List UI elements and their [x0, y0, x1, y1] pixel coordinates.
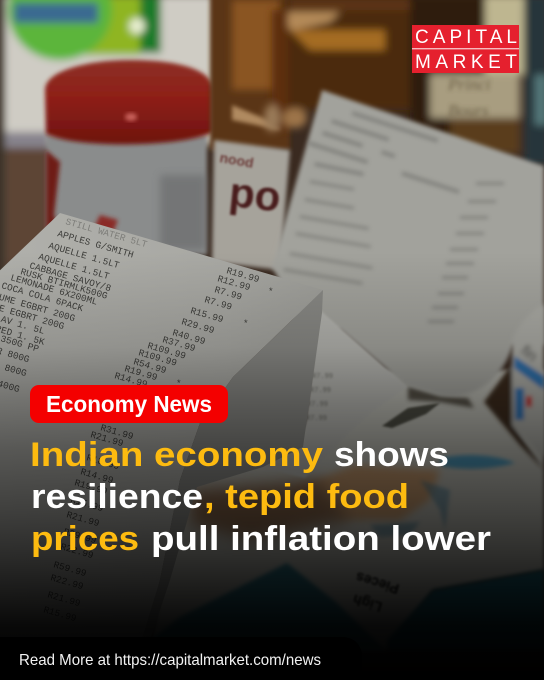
receipt item text: STILL WATER 5LT [64, 216, 149, 250]
red lid jar [45, 60, 213, 262]
category tag: Economy News: Economy News [46, 391, 212, 417]
headline: prices [31, 520, 139, 558]
receipt item text: R14.99 [113, 370, 149, 390]
receipt item text: R7.99 [213, 284, 243, 303]
receipt item text: AQUELLE 1.5LT [47, 240, 121, 271]
receipt item text: R19.99 [123, 363, 159, 383]
receipt item text: * [243, 318, 249, 329]
receipt item text: R54.99 [132, 356, 168, 376]
headline: Indian economy [30, 436, 323, 474]
curled receipt: R7.99 [307, 401, 328, 409]
receipt item text: 350G PP [0, 333, 40, 355]
peanut butter bottle: po [227, 168, 283, 220]
receipt item text: R40.99 [171, 327, 207, 347]
front receipt [0, 213, 323, 645]
shelf products: Bours [448, 101, 489, 120]
receipt item text: R22.99 [59, 541, 95, 561]
curled receipt: R7.99 [312, 373, 333, 381]
receipt item text: AQUELLE 1.5LT [37, 251, 111, 282]
receipt item text: R29.99 [62, 526, 98, 546]
curled receipt: R7.99 [306, 415, 327, 423]
receipt item text: R7.99 [203, 294, 233, 313]
receipt item text: CABBAGE SAVOY/8 [28, 260, 113, 294]
receipt item text: R19.99 [225, 265, 261, 285]
receipt item text: R29.99 [180, 316, 216, 336]
receipt item text [0, 216, 274, 624]
logo: Capital Market [412, 25, 519, 73]
receipt item text: R12.99 [216, 273, 252, 293]
headline [30, 436, 491, 558]
headline: resilience [31, 478, 203, 516]
curled receipt: R7.99 [310, 387, 331, 395]
shelf products: Princi [447, 75, 491, 94]
receipt item text: R14.99 [79, 466, 115, 486]
logo: Capital Market: MARKET [415, 52, 517, 73]
receipt item text: R21.99 [89, 429, 125, 449]
map paper with coins [150, 370, 544, 650]
receipt item text: R19.99 [73, 477, 109, 497]
receipt item text: R15.99 [189, 305, 225, 325]
receipt item text: APPLES G/SMITH [56, 228, 135, 261]
receipt item text: * [268, 286, 274, 297]
receipt item text: LEMONADE 6X200ML [9, 272, 99, 308]
shelf products [0, 0, 544, 285]
right bottle: fin [517, 342, 540, 365]
category tag: Economy News [30, 385, 228, 423]
receipt item text: R15.99 [42, 604, 78, 624]
peanut butter bottle: nood [218, 149, 255, 171]
receipt item text: 800G [3, 362, 28, 379]
right bottle [484, 304, 544, 470]
teal booklets [150, 563, 544, 650]
receipt item text: R109.99 [146, 340, 187, 362]
wooden background bottles [264, 0, 544, 165]
receipt item text: COCA COLA 6PACK [0, 280, 85, 314]
receipt item text: R37.99 [161, 334, 197, 354]
receipt item text: R31.99 [99, 422, 135, 442]
receipt item text: RUSK BTIRMLK500G [19, 266, 109, 302]
curled receipt [263, 310, 407, 478]
map paper with coins: Ligh [351, 591, 384, 615]
logo: Capital Market: CAPITAL [415, 27, 517, 48]
receipt item text: R15.99 [69, 494, 105, 514]
receipt item text: R21.99 [46, 589, 82, 609]
map paper with coins: Pieces [354, 569, 401, 597]
footer: read more link: Read More at https://capitalmarket.com/news [19, 652, 321, 669]
receipt item text: R21.99 [65, 509, 101, 529]
headline: shows [334, 436, 449, 474]
receipt item text: R109.99 [137, 347, 178, 369]
headline: , tepid food [204, 478, 409, 516]
receipt item text: R18.99 [85, 452, 121, 472]
footer: read more link [0, 637, 362, 680]
headline: pull inflation lower [151, 520, 491, 558]
receipt item text: R22.99 [49, 572, 85, 592]
receipt item text: * [176, 378, 182, 389]
receipt item text: R59.99 [52, 559, 88, 579]
peanut butter bottle [210, 0, 290, 270]
back receipt [272, 90, 544, 396]
